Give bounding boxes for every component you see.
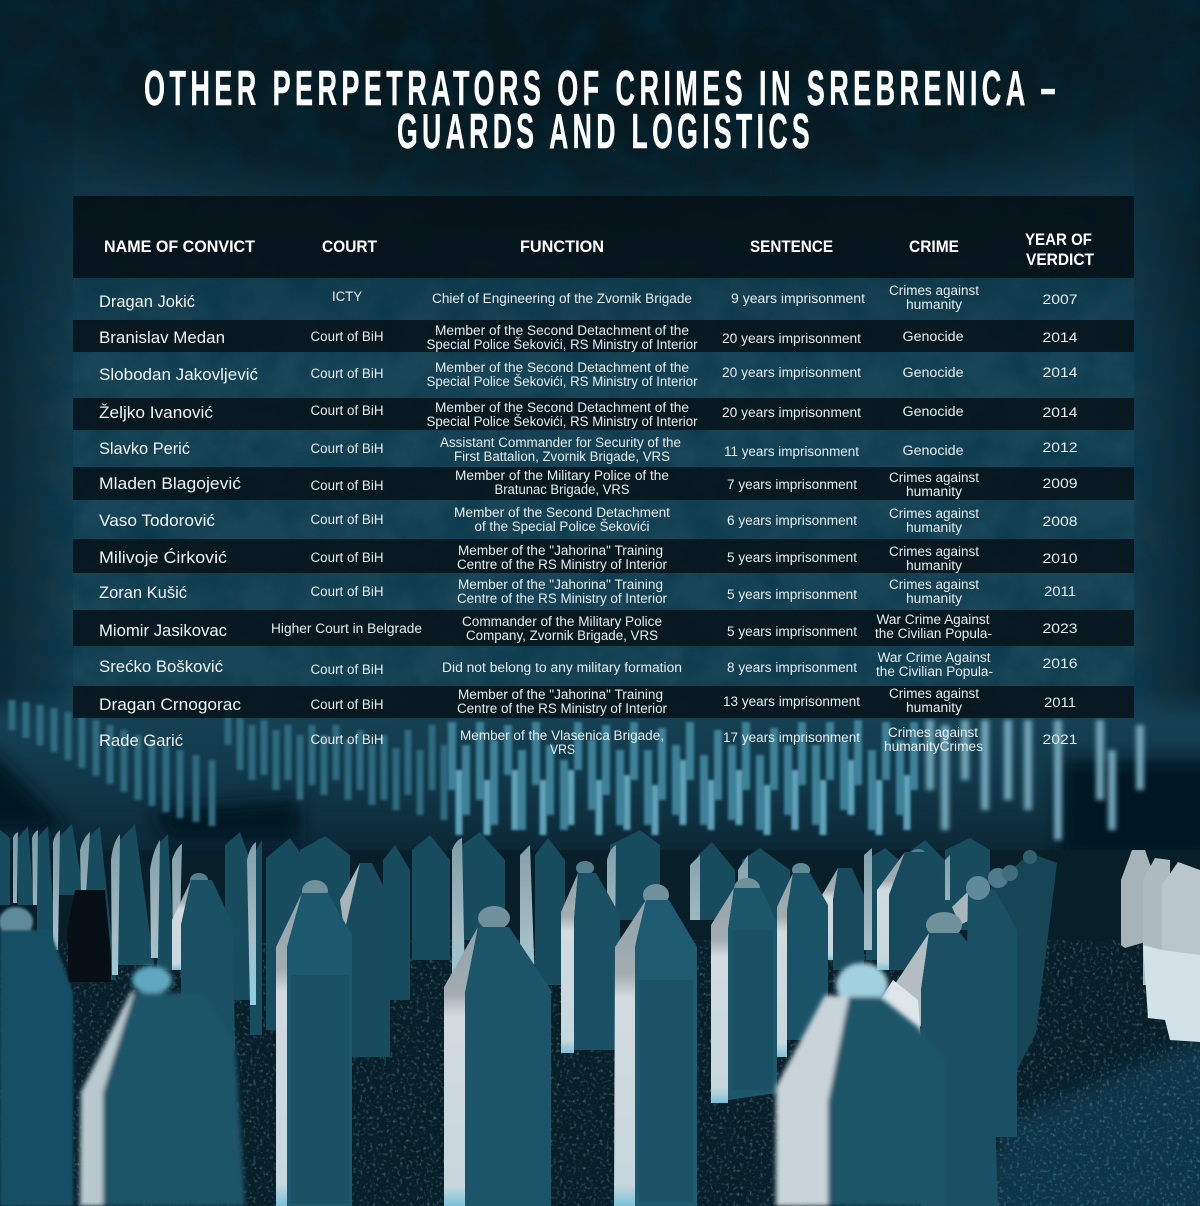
row: Rade Garić: Member of the Vlasenica Brigade,	[460, 728, 664, 743]
row: Srećko Bošković: Court of BiH	[310, 662, 384, 677]
table header: COURT	[322, 238, 377, 256]
row: Dragan Jokić: humanity	[906, 297, 962, 312]
black gravestone	[67, 890, 111, 982]
row: Željko Ivanović: 2014	[1042, 405, 1078, 420]
row: Miomir Jasikovac: the Civilian Popula-	[875, 626, 992, 641]
row: Dragan Jokić	[99, 283, 1078, 312]
table header: CRIME	[909, 238, 959, 256]
row: Mladen Blagojević	[99, 468, 1078, 499]
row: Željko Ivanović: Željko Ivanović	[99, 403, 214, 422]
row: Zoran Kušić: Zoran Kušić	[99, 583, 187, 602]
title: GUARDS AND LOGISTICS	[397, 105, 814, 159]
gravestone H	[561, 861, 620, 1053]
row: Milivoje Ćirković: Crimes against	[889, 544, 979, 559]
row: Milivoje Ćirković	[99, 543, 1078, 573]
row: Slobodan Jakovljević: Special Police Šekovići, RS Ministry of Interior	[426, 374, 698, 389]
row: Branislav Medan: Special Police Šekovići, RS Ministry of Interior	[426, 337, 698, 352]
row: Milivoje Ćirković: Milivoje Ćirković	[99, 548, 228, 567]
row: Vaso Todorović: Member of the Second Detachment	[454, 505, 670, 520]
row: Milivoje Ćirković: Centre of the RS Ministry of Interior	[457, 557, 667, 572]
row: Dragan Crnogorac: 13 years imprisonment	[723, 694, 860, 709]
row: Branislav Medan: 20 years imprisonment	[722, 331, 861, 346]
row: Rade Garić: Rade Garić	[99, 731, 183, 750]
row: Miomir Jasikovac: War Crime Against	[876, 612, 990, 627]
row: Milivoje Ćirković: Court of BiH	[310, 550, 384, 565]
right cluster of pale gravestones	[1121, 850, 1200, 1042]
row: Miomir Jasikovac: Commander of the Military Police	[462, 614, 662, 629]
row: Srećko Bošković: Did not belong to any military formation	[442, 660, 682, 675]
row: Slavko Perić: Assistant Commander for Security of the	[440, 435, 681, 450]
table header: FUNCTION	[520, 238, 604, 256]
row: Slavko Perić: Slavko Perić	[99, 439, 190, 458]
gravestone I	[614, 884, 697, 1206]
row: Vaso Todorović: Crimes against	[889, 506, 979, 521]
row: Slavko Perić: 2012	[1042, 440, 1078, 455]
row: Slobodan Jakovljević: Member of the Second Detachment of the	[435, 360, 689, 375]
blurred gravestone B	[80, 966, 245, 1206]
row: Mladen Blagojević: Bratunac Brigade, VRS	[494, 482, 630, 497]
table header: VERDICT	[1026, 251, 1094, 269]
row: Branislav Medan: Court of BiH	[310, 329, 384, 344]
row: Vaso Todorović: Vaso Todorović	[99, 511, 215, 530]
row: Srećko Bošković: 2016	[1042, 656, 1078, 671]
row: Slobodan Jakovljević	[99, 360, 1078, 389]
row: Milivoje Ćirković: 2010	[1042, 551, 1078, 566]
gravestone G	[444, 906, 551, 1206]
row: Dragan Crnogorac: Centre of the RS Ministry of Interior	[457, 701, 667, 716]
row: Dragan Crnogorac: Crimes against	[889, 686, 979, 701]
row: Miomir Jasikovac: 5 years imprisonment	[727, 624, 857, 639]
row: Slavko Perić: First Battalion, Zvornik Brigade, VRS	[454, 449, 670, 464]
row: Dragan Crnogorac: Member of the "Jahorina" Training	[458, 687, 663, 702]
gravestone A	[0, 907, 73, 1206]
row: Rade Garić: humanityCrimes	[884, 739, 983, 754]
row: Željko Ivanović	[99, 400, 1078, 429]
row: Dragan Crnogorac: 2011	[1044, 695, 1076, 710]
gravestone N	[880, 912, 998, 1206]
row: Slavko Perić: Court of BiH	[310, 441, 384, 456]
row: Zoran Kušić: 2011	[1044, 584, 1076, 599]
row: Zoran Kušić: 5 years imprisonment	[727, 587, 857, 602]
cemetery photo	[0, 690, 1200, 1206]
row: Miomir Jasikovac	[99, 612, 1078, 643]
row: Branislav Medan	[99, 323, 1078, 352]
row: Branislav Medan: Member of the Second Detachment of the	[435, 323, 689, 338]
row: Mladen Blagojević: Court of BiH	[310, 478, 384, 493]
row: Dragan Crnogorac: humanity	[906, 700, 962, 715]
row: Miomir Jasikovac: Company, Zvornik Brigade, VRS	[466, 628, 658, 643]
row: Dragan Jokić: Dragan Jokić	[99, 292, 195, 311]
row: Srećko Bošković: Srećko Bošković	[99, 657, 223, 676]
distant grave rows	[0, 690, 1200, 860]
row: Rade Garić: 17 years imprisonment	[723, 730, 860, 745]
row: Slobodan Jakovljević: 2014	[1042, 365, 1078, 380]
table header: SENTENCE	[750, 238, 833, 256]
row: Srećko Bošković: War Crime Against	[878, 650, 991, 665]
row: Zoran Kušić: Centre of the RS Ministry of Interior	[457, 591, 667, 606]
row: Mladen Blagojević: 7 years imprisonment	[727, 477, 857, 492]
blurred gravestone M	[776, 963, 945, 1206]
row: Slobodan Jakovljević: 20 years imprisonment	[722, 365, 861, 380]
row: Dragan Jokić: Crimes against	[889, 283, 979, 298]
row: Vaso Todorović: Court of BiH	[310, 512, 384, 527]
row: Željko Ivanović: Special Police Šekovići, RS Ministry of Interior	[426, 414, 698, 429]
row: Slavko Perić: Genocide	[902, 443, 964, 458]
row: Zoran Kušić: humanity	[906, 591, 962, 606]
row: Zoran Kušić	[99, 577, 1076, 606]
row: Miomir Jasikovac: Miomir Jasikovac	[99, 621, 227, 640]
row: Dragan Crnogorac	[99, 686, 1076, 716]
row: Branislav Medan: Genocide	[902, 329, 964, 344]
row: Milivoje Ćirković: humanity	[906, 558, 962, 573]
row: Miomir Jasikovac: 2023	[1042, 621, 1078, 636]
row: Rade Garić: 2021	[1042, 732, 1078, 747]
row: Zoran Kušić: Court of BiH	[310, 584, 384, 599]
ground	[0, 850, 1200, 1206]
row: Željko Ivanović: Court of BiH	[310, 403, 384, 418]
row: Vaso Todorović: 2008	[1042, 514, 1078, 529]
table	[73, 196, 1134, 757]
row: Dragan Jokić: ICTY	[332, 289, 362, 304]
row: Vaso Todorović: of the Special Police Šekovići	[474, 519, 650, 534]
gravestone E	[276, 880, 352, 1206]
row: Mladen Blagojević: Crimes against	[889, 470, 979, 485]
row: Rade Garić: VRS	[550, 742, 575, 757]
row: Vaso Todorović	[99, 505, 1078, 535]
table header: YEAR OF	[1025, 231, 1092, 249]
row: Dragan Jokić: Chief of Engineering of the Zvornik Brigade	[432, 291, 692, 306]
title	[144, 62, 1060, 159]
row: Srećko Bošković: the Civilian Popula-	[876, 664, 993, 679]
header band	[73, 196, 1134, 278]
row: Miomir Jasikovac: Higher Court in Belgrade	[271, 621, 422, 636]
row bands	[73, 320, 1134, 718]
row: Slavko Perić: 11 years imprisonment	[724, 444, 859, 459]
row: Rade Garić: Court of BiH	[310, 732, 384, 747]
row: Mladen Blagojević: Member of the Military Police of the	[455, 468, 669, 483]
row: Milivoje Ćirković: Member of the "Jahorina" Training	[458, 543, 663, 558]
row: Milivoje Ćirković: 5 years imprisonment	[727, 550, 857, 565]
receding gravestones right	[952, 850, 1057, 1137]
back row of gravestones	[0, 824, 990, 1035]
table header	[104, 231, 1094, 269]
table header: NAME OF CONVICT	[104, 238, 255, 256]
row: Zoran Kušić: Crimes against	[889, 577, 979, 592]
row: Srećko Bošković: 8 years imprisonment	[727, 660, 857, 675]
row: Vaso Todorović: humanity	[906, 520, 962, 535]
row: Dragan Jokić: 2007	[1042, 292, 1078, 307]
row: Mladen Blagojević: Mladen Blagojević	[99, 474, 242, 493]
row: Željko Ivanović: Member of the Second Detachment of the	[435, 400, 689, 415]
gravestone D	[172, 873, 235, 1050]
row: Dragan Crnogorac: Court of BiH	[310, 697, 384, 712]
row: Slobodan Jakovljević: Court of BiH	[310, 366, 384, 381]
row: Branislav Medan: 2014	[1042, 330, 1078, 345]
row: Mladen Blagojević: humanity	[906, 484, 962, 499]
row: Dragan Jokić: 9 years imprisonment	[731, 291, 865, 306]
row: Rade Garić	[99, 725, 1078, 757]
row: Slobodan Jakovljević: Genocide	[902, 365, 964, 380]
row: Dragan Crnogorac: Dragan Crnogorac	[99, 695, 241, 714]
row: Srećko Bošković	[99, 650, 1078, 679]
row: Slobodan Jakovljević: Slobodan Jakovljević	[99, 365, 258, 384]
row: Željko Ivanović: Genocide	[902, 404, 964, 419]
row: Vaso Todorović: 6 years imprisonment	[727, 513, 857, 528]
gravestone F	[340, 863, 390, 1057]
row: Zoran Kušić: Member of the "Jahorina" Training	[458, 577, 663, 592]
row: Željko Ivanović: 20 years imprisonment	[722, 405, 861, 420]
row: Rade Garić: Crimes against	[888, 725, 978, 740]
row: Mladen Blagojević: 2009	[1042, 476, 1078, 491]
row: Slavko Perić	[99, 435, 1078, 464]
gravestone J	[711, 878, 777, 1103]
row: Branislav Medan: Branislav Medan	[99, 328, 225, 347]
gravestones K and L	[777, 849, 940, 1057]
